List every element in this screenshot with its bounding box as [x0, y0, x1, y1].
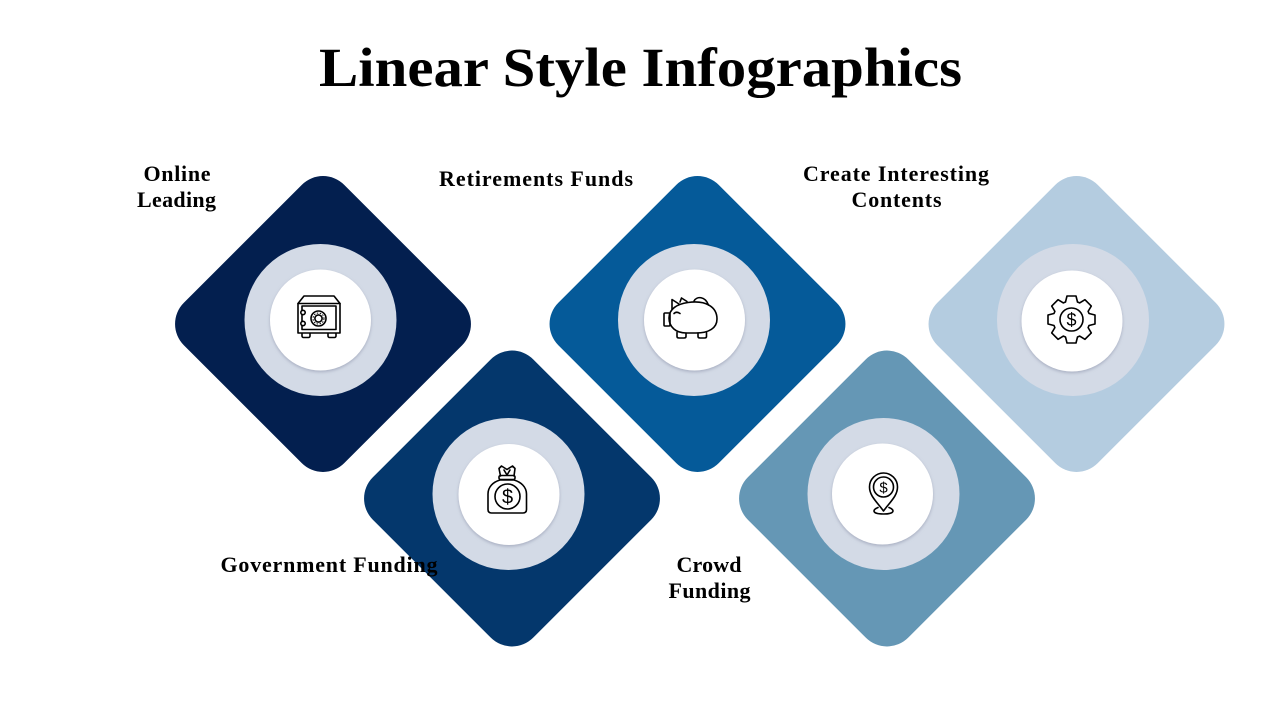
- diamond: retirement funds: [537, 164, 858, 484]
- outer ring: government funding: [432, 418, 584, 570]
- panel: online leading: [137, 161, 483, 484]
- icon: location pin with dollar: $: [879, 480, 888, 496]
- diamond: create interesting contents: [916, 164, 1237, 484]
- inner circle: government funding: [458, 444, 560, 545]
- inner circle: retirement funds: [644, 270, 745, 370]
- label: crowd funding: Crowd: [676, 552, 742, 577]
- label: government funding: Government Funding: [220, 552, 438, 577]
- icon: safe: [298, 296, 340, 338]
- inner circle: online leading: [270, 270, 371, 370]
- outer ring: create interesting contents: [997, 244, 1149, 396]
- diamond: online leading: [163, 164, 483, 484]
- icon: location pin with dollar: [870, 473, 898, 514]
- panel: crowd funding: [668, 338, 1047, 659]
- inner circle: crowd funding: [832, 444, 933, 544]
- title: Linear Style Infographics: [319, 37, 962, 98]
- outer ring: retirement funds: [618, 244, 770, 396]
- label: create interesting contents: Create Interesting: [803, 161, 989, 186]
- icon: money bag: [488, 466, 526, 513]
- icon: piggy bank: [664, 298, 717, 338]
- panel: government funding: [220, 338, 672, 659]
- icon: gear with dollar: $: [1066, 310, 1077, 330]
- label: create interesting contents: Contents: [852, 187, 942, 212]
- diamond: government funding: [352, 338, 672, 659]
- panel: retirement funds: [439, 164, 858, 484]
- outer ring: crowd funding: [808, 418, 960, 570]
- label: retirement funds: Retirements Funds: [439, 166, 633, 191]
- label: online leading: Leading: [137, 187, 216, 212]
- diamond: crowd funding: [727, 338, 1047, 659]
- outer ring: online leading: [244, 244, 396, 396]
- label: crowd funding: Funding: [668, 578, 750, 603]
- icon: money bag: $: [502, 486, 513, 508]
- panel: create interesting contents: [803, 161, 1237, 484]
- icon: gear with dollar: [1048, 296, 1095, 343]
- inner circle: create interesting contents: [1022, 270, 1122, 372]
- label: online leading: Online: [144, 161, 211, 186]
